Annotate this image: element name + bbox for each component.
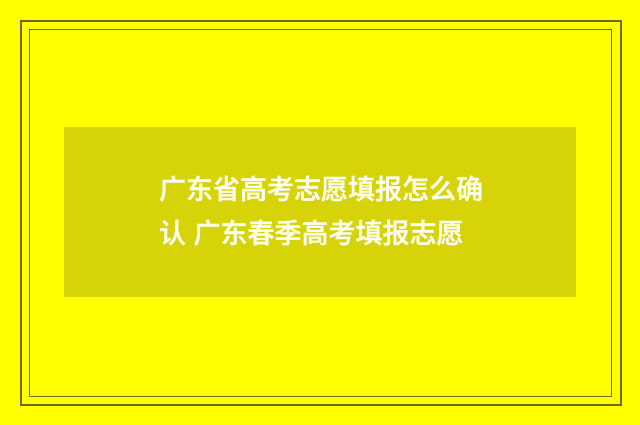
title text — [159, 175, 483, 249]
title text: 广东省高考志愿填报怎么确 — [159, 175, 483, 205]
title panel — [64, 127, 576, 297]
inner frame — [29, 29, 612, 397]
title text: 认 广东春季高考填报志愿 — [159, 219, 464, 249]
